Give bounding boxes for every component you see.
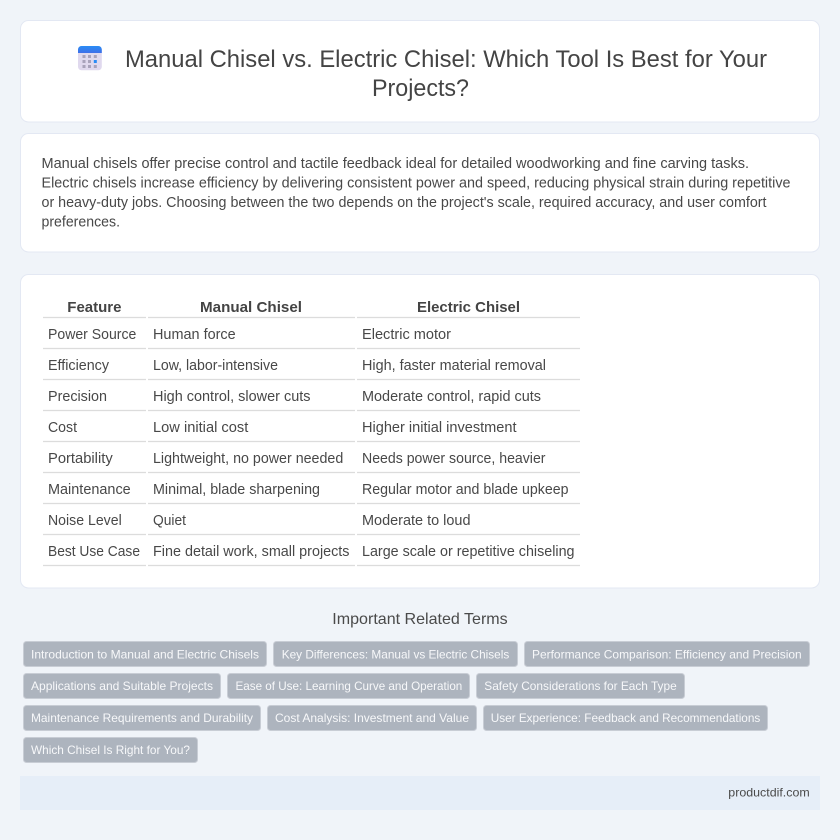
row: portability: Portability <box>48 451 114 467</box>
row: efficiency: Low, labor-intensive <box>153 358 278 374</box>
intro text: or heavy-duty jobs. Choosing between the two depends on the project's scale, required accuracy, and user comfort <box>42 195 767 211</box>
tag labels: Key Differences: Manual vs Electric Chisels <box>282 647 509 661</box>
footer <box>20 776 820 810</box>
row: best use case <box>48 544 575 560</box>
row: efficiency: High, faster material removal <box>362 358 546 374</box>
row: cost: Low initial cost <box>153 420 248 436</box>
intro text: preferences. <box>42 214 120 230</box>
row: noise level: Noise Level <box>48 513 122 529</box>
row: power source: Power Source <box>48 327 136 343</box>
table header row <box>67 299 520 316</box>
intro text: Electric chisels increase efficiency by delivering consistent power and speed, reducing physical strain during repetitive <box>42 176 791 192</box>
row: power source: Electric motor <box>362 327 451 343</box>
row: power source: Human force <box>153 327 236 343</box>
panel: header <box>20 20 820 122</box>
row: power source <box>48 327 451 343</box>
table header row: Feature <box>67 299 122 316</box>
row: portability: Needs power source, heavier <box>362 451 546 467</box>
title: Manual Chisel vs. Electric Chisel: Which Tool Is Best for Your <box>125 46 767 73</box>
row: maintenance: Maintenance <box>48 482 131 498</box>
footer source text: productdif.com <box>728 786 810 800</box>
row: maintenance: Regular motor and blade upkeep <box>362 482 569 498</box>
row: portability <box>48 451 546 467</box>
tag labels: Safety Considerations for Each Type <box>484 679 677 693</box>
row: efficiency <box>48 358 546 374</box>
panel: introduction <box>20 134 820 252</box>
title <box>125 46 767 102</box>
row: maintenance <box>48 482 569 498</box>
table header row: Electric Chisel <box>417 299 520 316</box>
row: cost: Cost <box>48 420 77 436</box>
row: maintenance: Minimal, blade sharpening <box>153 482 320 498</box>
tag labels <box>31 647 802 757</box>
related term tags <box>24 642 810 762</box>
row: precision: High control, slower cuts <box>153 389 310 405</box>
tag labels: Performance Comparison: Efficiency and Precision <box>532 647 802 661</box>
heading: important related terms: Important Related Terms <box>332 611 508 628</box>
row: best use case: Best Use Case <box>48 544 140 560</box>
row: cost <box>48 420 517 436</box>
row: noise level: Moderate to loud <box>362 513 471 529</box>
row: noise level <box>48 513 471 529</box>
tag labels: Maintenance Requirements and Durability <box>31 711 253 725</box>
row: portability: Lightweight, no power needed <box>153 451 343 467</box>
row: best use case: Large scale or repetitive chiseling <box>362 544 575 560</box>
row: precision: Moderate control, rapid cuts <box>362 389 541 405</box>
tag labels: Which Chisel Is Right for You? <box>31 743 190 757</box>
intro text <box>42 156 791 230</box>
title: Projects? <box>372 75 469 102</box>
table header row: Manual Chisel <box>200 299 302 316</box>
icon: calendar <box>78 46 102 70</box>
row: precision: Precision <box>48 389 107 405</box>
panel: comparison table <box>20 274 820 588</box>
tag labels: Applications and Suitable Projects <box>31 679 213 693</box>
row: noise level: Quiet <box>153 513 186 529</box>
tag labels: Cost Analysis: Investment and Value <box>275 711 469 725</box>
tag labels: Introduction to Manual and Electric Chisels <box>31 647 259 661</box>
row: cost: Higher initial investment <box>362 420 517 436</box>
row: efficiency: Efficiency <box>48 358 110 374</box>
row: precision <box>48 389 541 405</box>
tag labels: User Experience: Feedback and Recommendations <box>491 711 760 725</box>
intro text: Manual chisels offer precise control and tactile feedback ideal for detailed woodworking and fine carving tasks. <box>42 156 749 172</box>
tag labels: Ease of Use: Learning Curve and Operation <box>236 679 462 693</box>
row: best use case: Fine detail work, small projects <box>153 544 350 560</box>
